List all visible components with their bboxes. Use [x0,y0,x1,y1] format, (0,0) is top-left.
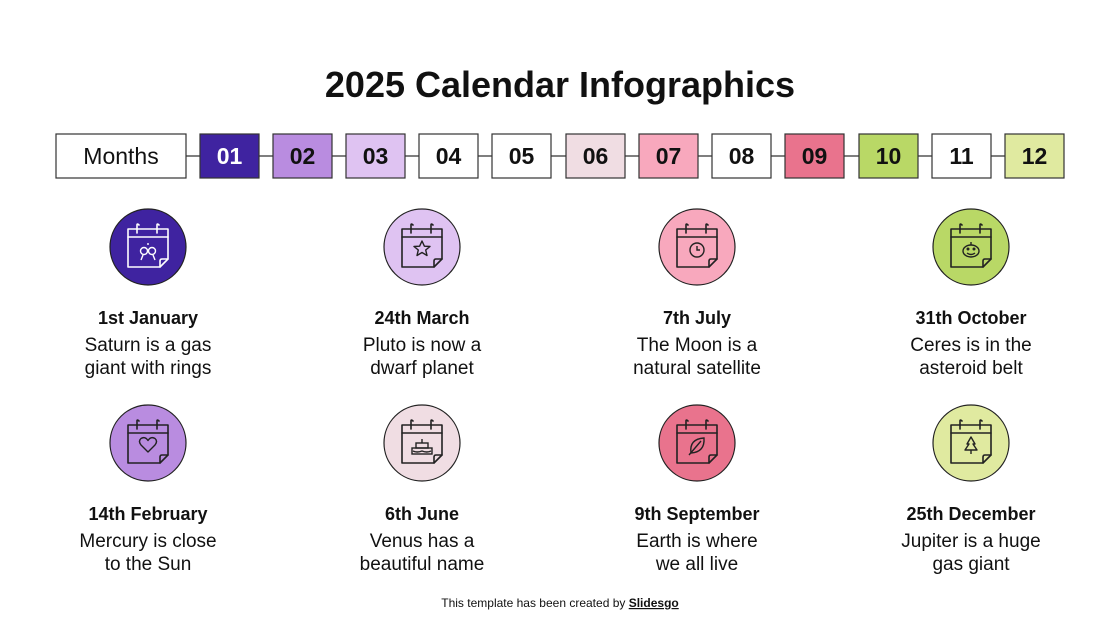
month timeline: 06 [583,143,608,169]
icon: calendar with cake [384,405,460,481]
item: 31th October: 31th October [915,308,1027,328]
month timeline: 04 [436,143,461,169]
item: 6th June: beautiful name [360,554,484,575]
month timeline: 02 [290,143,315,169]
item: 14th February: 14th February [88,504,208,524]
item: 25th December: gas giant [932,554,1010,575]
item: 14th February: Mercury is close [79,531,217,552]
item: 24th March: 24th March [374,308,470,328]
item: 7th July: 7th July [663,308,731,328]
item: 9th September: 9th September [634,504,760,524]
item: 24th March [363,209,482,379]
icon: calendar with star [384,209,460,285]
item: 24th March: Pluto is now a [363,335,482,356]
item: 31th October: Ceres is in the [910,335,1032,356]
item: 14th February [79,405,217,575]
month timeline: 09 [802,143,827,169]
item: 1st January: giant with rings [85,358,211,379]
item: 9th September: we all live [655,554,738,575]
item: 6th June: Venus has a [370,531,475,552]
item: 9th September [634,405,760,575]
icon: calendar with tree [933,405,1009,481]
item: 1st January [85,209,211,379]
month timeline: 11 [949,143,974,169]
item: 31th October [910,209,1032,379]
item: 6th June [360,405,484,575]
item: 7th July: The Moon is a [637,335,758,356]
item: 24th March: dwarf planet [370,358,474,379]
month timeline: 07 [656,143,681,169]
month timeline: Months [83,143,159,169]
month timeline [56,134,1064,178]
month timeline: 12 [1022,143,1047,169]
month timeline: 10 [876,143,901,169]
title: 2025 Calendar Infographics [325,64,795,105]
month timeline: 05 [509,143,534,169]
month timeline: 03 [363,143,388,169]
item: 9th September: Earth is where [636,531,758,552]
item: 1st January: Saturn is a gas [85,335,211,356]
item: 31th October: asteroid belt [919,358,1023,379]
footer credit: This template has been created by Slidesgo [441,596,679,610]
icon: calendar with leaf [659,405,735,481]
icon: calendar with clock [659,209,735,285]
item: 1st January: 1st January [98,308,198,328]
item: 14th February: to the Sun [105,554,191,575]
item: 7th July: natural satellite [633,358,761,379]
icon: calendar with toast [110,209,186,285]
month timeline: 08 [729,143,754,169]
item: 6th June: 6th June [385,504,459,524]
item: 25th December: Jupiter is a huge [901,531,1041,552]
icon: calendar with heart [110,405,186,481]
month timeline: 01 [217,143,242,169]
item: 7th July [633,209,761,379]
item: 25th December: 25th December [906,504,1036,524]
item: 25th December [901,405,1041,575]
icon: calendar with pumpkin [933,209,1009,285]
